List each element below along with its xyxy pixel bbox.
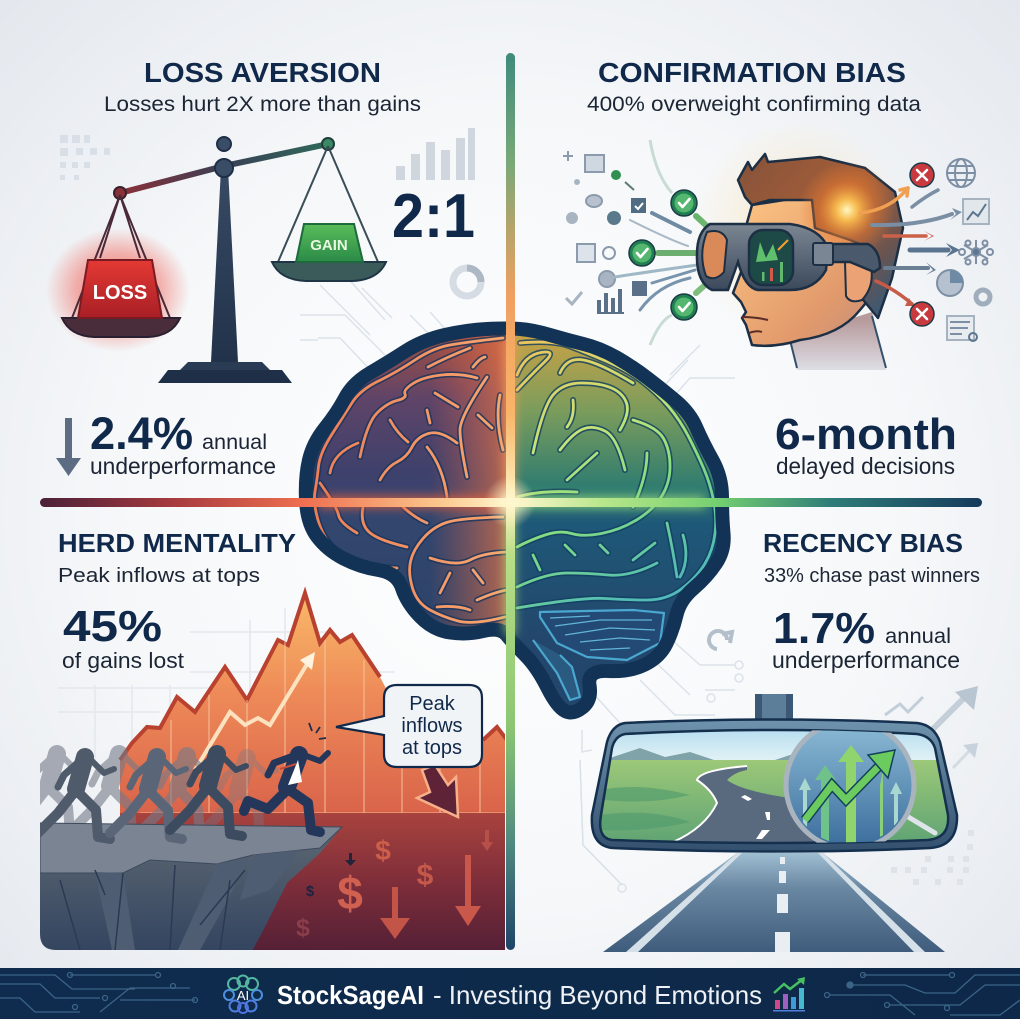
- logo: AI brain: AI: [237, 988, 249, 1003]
- heading: loss aversion: LOSS AVERSION: [144, 57, 381, 88]
- left hemisphere fill: [312, 336, 506, 626]
- subheading: chase past winners: 33% chase past winners: [764, 564, 980, 587]
- right chains: [278, 146, 378, 262]
- goggle strap: [818, 244, 880, 272]
- magnifier handle: [905, 815, 935, 833]
- mirror stem: [755, 694, 793, 720]
- falling dollars and arrows: $: [337, 867, 363, 919]
- icon: faded trend arrows: [885, 686, 978, 768]
- right lens with chart: [749, 230, 793, 285]
- divider glows: [320, 340, 705, 635]
- brain outline: [306, 328, 724, 712]
- winding road: [673, 766, 820, 842]
- stat label: underperformance: underperformance: [772, 647, 960, 673]
- circuit background lines: [300, 275, 743, 892]
- panel: confirmation bias: [563, 57, 993, 479]
- decorative data dots: [60, 135, 110, 180]
- scale glow: [46, 228, 190, 352]
- ear: [845, 256, 872, 301]
- callout: peak inflows: [336, 685, 482, 767]
- down arrows: [345, 830, 493, 939]
- stat label: delayed decisions: delayed decisions: [776, 453, 955, 479]
- right data icons: [937, 159, 993, 341]
- reject marks: [910, 163, 934, 326]
- panel: herd mentality: [10, 528, 510, 955]
- rearview mirror: [592, 694, 957, 852]
- runner three: [170, 734, 246, 836]
- icon: down arrow: [56, 418, 81, 476]
- goggle buckle: [813, 243, 833, 265]
- rising arrow: [195, 656, 312, 770]
- market chart and cliff scene: [10, 593, 510, 955]
- cliff facets: [95, 850, 300, 950]
- falling dollars and arrows: $: [306, 883, 315, 900]
- green trend arrow: [805, 760, 885, 820]
- chart grid: [58, 608, 395, 760]
- stat: 2:1: 2:1: [392, 182, 475, 251]
- heading: recency bias: RECENCY BIAS: [763, 528, 963, 558]
- left pan: [62, 318, 180, 337]
- right hemisphere fill: [515, 336, 717, 706]
- incoming arrows: [615, 213, 724, 310]
- outgoing arrows: [860, 188, 952, 304]
- arrow heads: [905, 208, 962, 306]
- icon: refresh: [709, 631, 732, 649]
- icon: footer chart: [773, 977, 805, 1012]
- icon: balance scale: [46, 137, 386, 383]
- subheading: peak inflows: Peak inflows at tops: [58, 564, 260, 587]
- callout: peak inflows: inflows: [401, 715, 463, 737]
- mouth: [742, 317, 768, 333]
- left chains: [72, 195, 170, 318]
- subheading: losses hurt: Losses hurt 2X more than gains: [104, 93, 421, 116]
- stat label: annual: annual: [202, 431, 267, 454]
- stat label: gains lost: of gains lost: [62, 648, 184, 673]
- mirror scene: [601, 731, 947, 842]
- shock marks: [309, 723, 326, 739]
- market ridge line: [120, 593, 507, 760]
- left lens: [702, 231, 727, 278]
- falling dollars and arrows: $: [296, 914, 310, 942]
- brain: [306, 328, 724, 712]
- left warm glow: [435, 336, 506, 626]
- icon: faded donut: [453, 268, 481, 296]
- right gyri lines: [517, 342, 716, 608]
- falling dollars and arrows: [296, 835, 434, 942]
- falling dollars and arrows: $: [375, 835, 391, 866]
- heading: herd mentality: HERD MENTALITY: [58, 528, 296, 558]
- runner two: [110, 738, 186, 839]
- lower loss area: [120, 813, 510, 953]
- road ahead: [603, 853, 945, 952]
- brain glow: [799, 162, 895, 258]
- loss weight: LOSS: [93, 282, 147, 304]
- left gyri lines: [314, 338, 507, 622]
- falling arrow: [417, 765, 458, 817]
- figure: man with goggles: [690, 120, 910, 370]
- footer: [0, 968, 1020, 1019]
- footer tagline: - Investing Beyond Emotions: [433, 980, 762, 1010]
- cliff: [40, 823, 342, 955]
- stat label: underperformance: underperformance: [90, 453, 276, 479]
- magnifying glass: [786, 721, 914, 850]
- stat: 1.7%: 1.7%: [773, 604, 875, 653]
- right pan: [272, 262, 386, 281]
- mirror frame: [592, 720, 957, 852]
- panel: recency bias: [592, 528, 980, 952]
- logo: AI brain: [224, 976, 262, 1013]
- head glow: [690, 120, 910, 340]
- stat: 45%: 45%: [63, 602, 162, 651]
- footer circuits right: [824, 972, 1020, 1015]
- callout: peak inflows: at tops: [402, 737, 462, 759]
- subheading: overweight: 400% overweight confirming data: [587, 93, 921, 116]
- cliff cracks: [60, 865, 245, 950]
- scale beam: [120, 144, 328, 193]
- heading: confirmation bias: CONFIRMATION BIAS: [598, 57, 906, 88]
- panel: loss aversion: [46, 57, 481, 479]
- stat label: annual: annual: [885, 625, 951, 648]
- lead runner: [244, 736, 328, 832]
- dark sulci: [314, 338, 507, 622]
- runner one: [38, 738, 114, 839]
- scale base and post: [211, 168, 238, 362]
- face: [733, 185, 885, 346]
- cliff top surface: [40, 823, 342, 873]
- background crowd silhouettes: [40, 745, 279, 826]
- chart verticals: [140, 640, 505, 813]
- footer circuits left: [0, 972, 198, 1012]
- loss weight: [78, 260, 162, 318]
- goggles frame: [697, 224, 828, 290]
- hair: [738, 154, 903, 318]
- rising then falling market area: [120, 593, 507, 813]
- falling dollars and arrows: $: [417, 859, 434, 892]
- mirror inner edge: [600, 730, 948, 843]
- stat: 6-month: 6-month: [775, 410, 957, 459]
- gain weight: [296, 224, 363, 262]
- check marks: [629, 190, 697, 320]
- cerebellum: [540, 610, 664, 660]
- neck: [790, 312, 886, 370]
- footer brand: StockSageAI: [277, 980, 424, 1010]
- gain weight: GAIN: [310, 237, 348, 254]
- icon: faded bar chart: [396, 128, 475, 180]
- brain stem: [533, 640, 580, 700]
- centre glow: [484, 476, 536, 528]
- left data icons: [563, 140, 672, 345]
- decorative data squares: [891, 830, 974, 885]
- callout: peak inflows: Peak: [409, 693, 456, 715]
- vertical divider: [506, 53, 515, 950]
- horizontal divider: [40, 498, 982, 507]
- stat: 2.4%: 2.4%: [90, 408, 193, 459]
